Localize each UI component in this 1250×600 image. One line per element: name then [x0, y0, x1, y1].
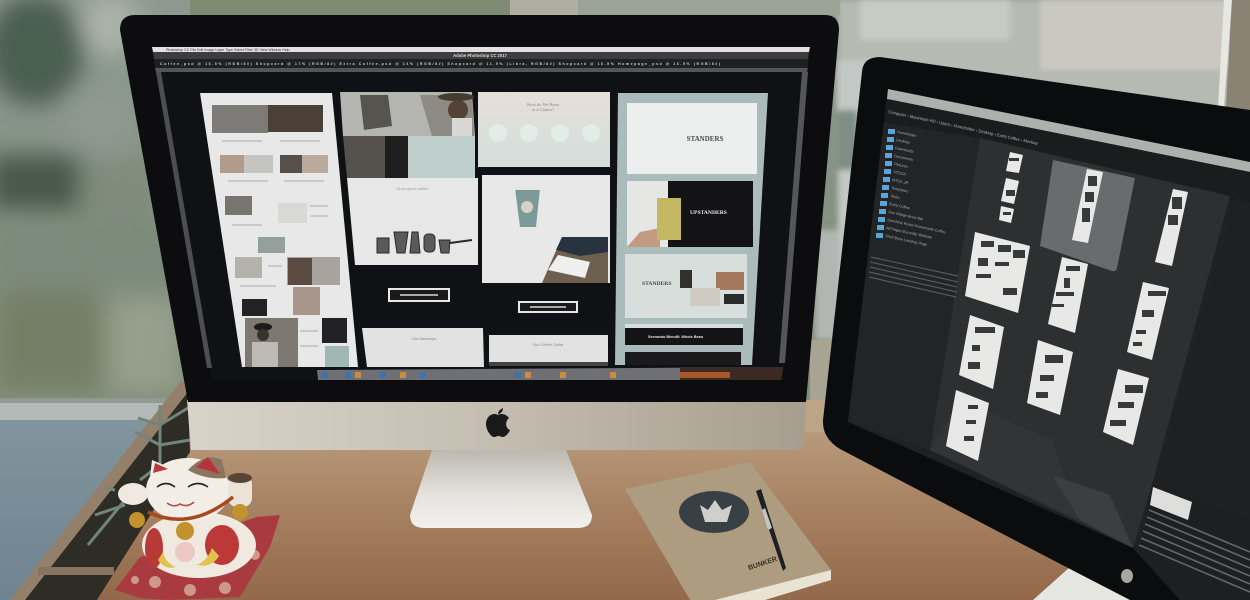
folder icons with names — [876, 129, 946, 247]
tab bar — [154, 59, 808, 68]
folder icons with names: STOCK — [893, 170, 907, 177]
folder icons with names: Desktop — [896, 138, 910, 145]
standers logotype: STANDERS — [642, 281, 671, 287]
folder icons with names: Shell Brew Landing Page — [885, 234, 927, 247]
design board 3: at a Glance? — [532, 107, 554, 112]
sidebar panel — [848, 122, 980, 450]
notebook imprint: BUNKER — [747, 556, 778, 572]
raised paw — [118, 483, 148, 505]
wooden desk — [97, 400, 1075, 600]
right info panel — [1155, 198, 1250, 520]
icon: right monitor apple logo — [1121, 569, 1133, 583]
right monitor — [823, 57, 1250, 600]
folder icons with names: Extra Coffee — [889, 202, 910, 210]
file thumbnails — [946, 152, 1188, 461]
design board 2 — [340, 92, 484, 367]
standers logotype top: STANDERS — [687, 135, 724, 143]
whole bean caption: Servando Blendll: Whole Bean — [648, 335, 704, 339]
gold collar — [148, 497, 233, 519]
breadcrumb text: Computer › Macintosh HD › Users › Homefolder › Desktop › Extra Coffee › Mockup — [888, 109, 1039, 146]
lucky cat figurine — [115, 457, 280, 600]
window sill and planter — [0, 382, 192, 600]
yellow crescents — [158, 552, 176, 568]
sidebar list stripes — [869, 257, 958, 297]
design board 3: How do We Bean — [527, 102, 560, 107]
man with hat — [438, 93, 474, 136]
thumbnail grid panel — [930, 138, 1230, 548]
title text: Adobe Photoshop CC 2017 — [453, 53, 508, 58]
design board 4 — [615, 93, 768, 365]
bezel — [823, 57, 1250, 600]
right ruler — [779, 72, 808, 363]
icon: apple logo — [486, 408, 510, 437]
bearded man figure — [252, 323, 278, 367]
window toolbar — [884, 99, 1250, 205]
folder icons with names: Sun Village Brew Bar — [888, 210, 924, 222]
selected tile — [1040, 160, 1135, 271]
Photoshop menu bar — [152, 47, 810, 52]
cat body — [142, 512, 256, 578]
tab text: Coffee_psd @ 16.5% (RGB/8#) Shopcard @ 17% (RGB/8#) Extra Coffee.psd @ 16% (RGB/8#) Shopcard @ 11.5% (Libra, RGB/8#) Shopcard @ 16.5% Homepage_psd @ 16.5% (RGB/8#) — [160, 62, 721, 66]
screen — [152, 47, 810, 380]
cat face — [157, 484, 208, 506]
flower badge — [175, 542, 195, 562]
notebook — [625, 462, 831, 600]
Photoshop title bar — [153, 52, 809, 59]
pen — [756, 489, 786, 571]
folder icons with names: All Pages Eurostile Website — [886, 226, 932, 240]
folder icons with names: Tasks — [890, 194, 900, 200]
centred heading: Once upon coffee — [396, 186, 429, 191]
browser title bar — [887, 89, 1250, 172]
folder icons with names: MTCK.JP — [892, 178, 909, 185]
folder icons with names: Documents — [894, 154, 914, 162]
design board 2: Our Barkeeps — [412, 336, 436, 341]
stand foot — [1033, 567, 1135, 600]
design board 3: Our Coffee Cellar — [532, 342, 564, 347]
screen — [848, 89, 1250, 600]
red cushion — [115, 515, 280, 600]
right paw — [228, 473, 252, 507]
folder icons with names: Pictures — [894, 162, 908, 169]
ruler — [155, 68, 808, 72]
bottom right metadata panel — [1138, 481, 1250, 600]
cat head — [146, 458, 230, 522]
paper cup — [515, 186, 540, 227]
folder icons with names: Downloads — [895, 146, 914, 154]
monitor stand — [410, 450, 592, 528]
folder icons with names: Templates — [891, 186, 909, 194]
design board 1 — [200, 93, 358, 367]
thumbnail details — [964, 158, 1182, 441]
design board 3 — [478, 92, 610, 366]
bells — [129, 504, 248, 540]
upstanders headline: UPSTANDERS — [690, 210, 727, 216]
black bezel — [120, 15, 839, 402]
grinder illustration — [377, 232, 472, 253]
dock — [317, 367, 783, 380]
notebook badge — [679, 491, 749, 533]
folder icons with names: Homefolder — [897, 130, 918, 138]
menu text: Photoshop CC File Edit Image Layer Type Select Filter 3D View Window Help — [166, 48, 290, 52]
left ruler — [156, 72, 212, 368]
red side patches — [145, 528, 163, 568]
reflected window — [930, 400, 1080, 520]
folder icons with names: Sunshine Roast Homemade Coffee — [887, 218, 946, 234]
aluminium chin — [187, 400, 806, 450]
main monitor: iMac — [120, 15, 839, 528]
